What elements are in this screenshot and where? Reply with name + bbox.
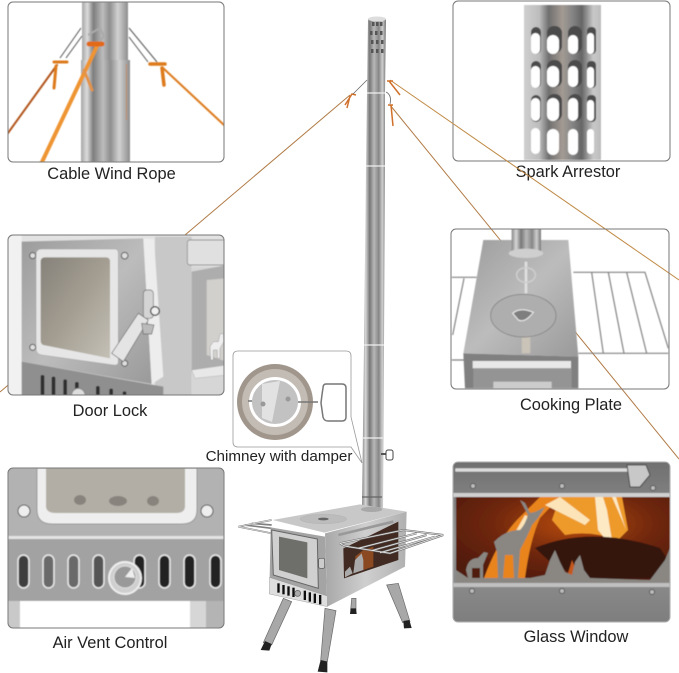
guy wires [353, 80, 390, 104]
label: Door Lock [73, 402, 148, 420]
flames [484, 497, 560, 578]
label: Spark Arrestor [516, 163, 621, 181]
damper ring [237, 364, 318, 440]
label: Cooking Plate [520, 396, 622, 414]
vent slots [277, 583, 321, 604]
deer and trees silhouette [456, 500, 670, 585]
vent knob [295, 590, 301, 596]
chimney collar [361, 507, 382, 512]
lid handle [318, 518, 329, 520]
chimney pole [81, 2, 130, 162]
right guy rope, short [390, 105, 679, 459]
stove with chimney [238, 16, 443, 672]
chimney pipe [362, 16, 386, 510]
label: Cable Wind Rope [47, 165, 176, 183]
panel: door lock [7, 233, 227, 420]
window frame [37, 468, 197, 524]
deer cutout [210, 333, 224, 360]
vent knob [109, 562, 141, 594]
perforated cylinder [524, 5, 601, 160]
guy knots [345, 81, 400, 126]
stove background [7, 233, 227, 397]
panel: glass window [453, 462, 670, 646]
door edge [143, 238, 163, 384]
spark holes [370, 22, 384, 53]
bolts [470, 484, 656, 594]
label: Glass Window [524, 628, 629, 646]
panel: chimney with damper [206, 351, 362, 465]
glass reflections [74, 495, 159, 506]
vent band [269, 577, 327, 607]
lower legs and opening [8, 601, 224, 628]
fire view [456, 497, 670, 585]
orange ropes [8, 44, 224, 162]
damper handle [321, 384, 346, 421]
rubber feet [261, 608, 412, 672]
steel body [453, 462, 670, 622]
damper handle on pipe [381, 450, 393, 460]
pipe joints [362, 93, 385, 497]
latch [627, 465, 650, 487]
window frame [36, 249, 118, 365]
legs [263, 583, 410, 662]
door frame [272, 530, 318, 588]
shelf wires [452, 272, 668, 360]
chimney base [509, 228, 543, 258]
panel: spark arrestor [453, 1, 670, 181]
log [535, 536, 668, 580]
stove top [273, 504, 407, 533]
top handle rod [338, 522, 393, 535]
panel: cable wind rope [8, 2, 224, 183]
vent slots [18, 555, 221, 588]
lid handle [513, 310, 533, 321]
bolts [18, 505, 213, 517]
metal plate [8, 468, 224, 538]
lower bright edge [453, 583, 670, 587]
side face [325, 512, 407, 607]
top rod [455, 468, 635, 472]
window glass [46, 468, 185, 513]
cooktop lid [300, 514, 347, 524]
side window frame [187, 240, 227, 378]
door plate [22, 238, 152, 384]
bolts [28, 252, 129, 368]
stove front [463, 353, 578, 388]
door latch [112, 290, 159, 362]
ridge and vent band [8, 536, 224, 601]
side window with fire [343, 522, 398, 578]
label: Air Vent Control [53, 634, 167, 652]
top bright edge [453, 493, 670, 497]
back left shelf [238, 520, 272, 533]
left guy rope [0, 95, 350, 392]
vent slots [40, 374, 127, 394]
door latch [319, 558, 325, 568]
top plate reflections [517, 262, 535, 353]
vent knob [72, 387, 85, 394]
stove top plate [463, 240, 578, 357]
wire loops [60, 28, 157, 62]
door glass [279, 537, 307, 578]
callout frame [233, 351, 362, 463]
panel: air vent control [8, 468, 224, 652]
window glass [41, 257, 110, 358]
right guy rope, long [390, 80, 679, 280]
right shelf [340, 530, 443, 553]
cooking plate lid [491, 294, 556, 337]
vent band [22, 362, 163, 397]
panel: cooking plate [451, 228, 669, 414]
label: Chimney with damper [206, 448, 352, 465]
front face [269, 527, 327, 607]
